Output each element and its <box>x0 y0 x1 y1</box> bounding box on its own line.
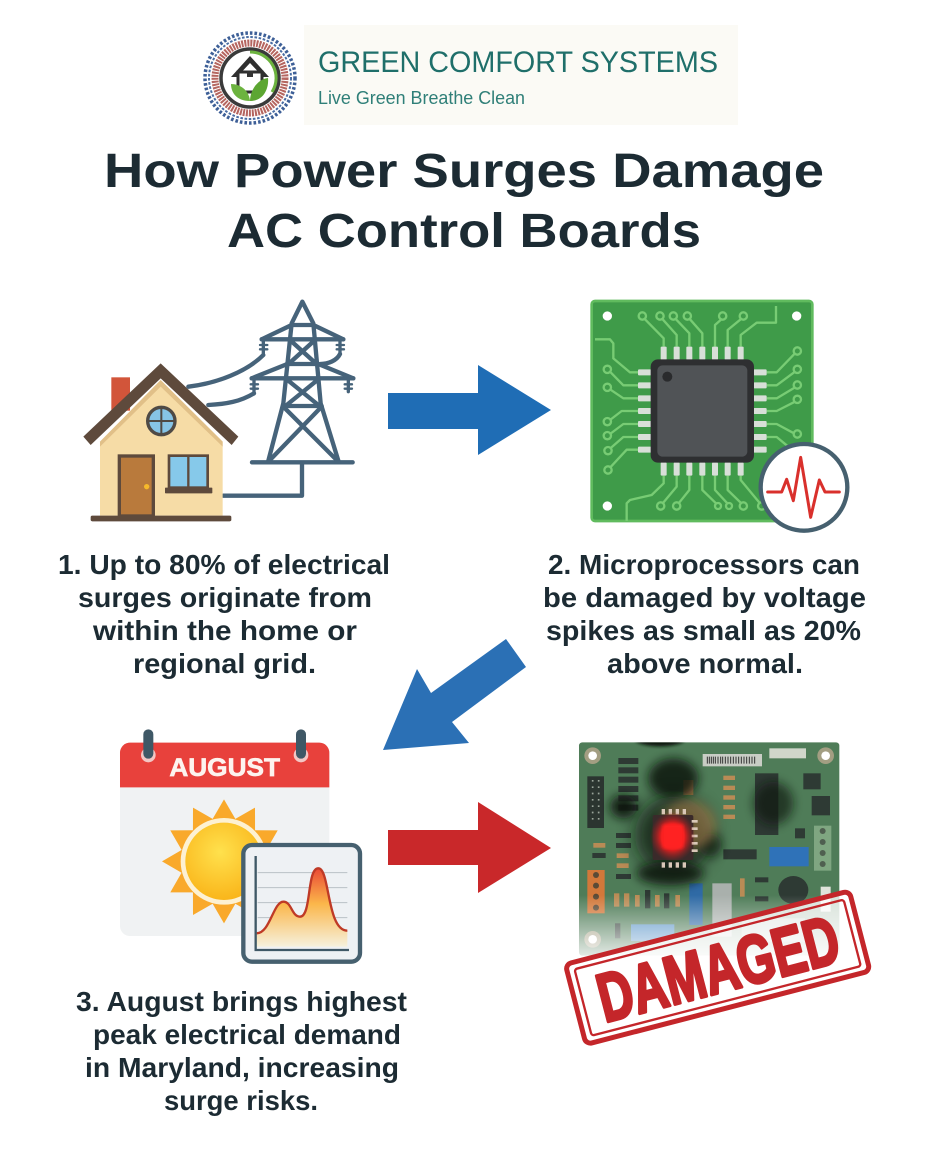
peak demand chart <box>243 845 360 962</box>
step 2 text: spikes as small as 20% <box>546 615 861 646</box>
bottom fade <box>579 895 839 957</box>
icon: transmission tower <box>188 302 353 496</box>
step 1 text: regional grid. <box>133 648 316 679</box>
step 2 text <box>543 549 866 679</box>
step 2 text: above normal. <box>607 648 803 679</box>
step 2 text: be damaged by voltage <box>543 582 866 613</box>
icon: circuit board with microprocessor <box>592 301 847 531</box>
title: How Power Surges Damage <box>104 145 824 198</box>
title: AC Control Boards <box>227 205 701 258</box>
arrow: step 1 to step 2 <box>388 365 551 455</box>
burnt glowing chip <box>650 800 717 868</box>
circuit traces <box>595 306 801 521</box>
logo banner <box>192 25 738 125</box>
scorch marks <box>610 732 793 885</box>
step 2 text: 2. Microprocessors can <box>548 549 860 580</box>
arrow: step 2 to step 3 <box>383 639 526 750</box>
calendar page <box>120 729 329 936</box>
corner mounting holes <box>584 747 834 948</box>
step 1 text: surges originate from <box>78 582 372 613</box>
icon: sun <box>162 799 286 923</box>
step 3 text <box>76 986 407 1116</box>
icon: house <box>83 363 238 521</box>
board components <box>587 748 831 942</box>
icon: voltage spike badge <box>761 444 847 531</box>
damaged stamp <box>565 891 870 1044</box>
icon: house and transmission tower <box>83 302 353 521</box>
step 3 text: surge risks. <box>164 1085 318 1116</box>
microprocessor chip <box>651 359 754 463</box>
logo badge <box>205 33 295 123</box>
chip pins <box>638 347 767 476</box>
icon: August calendar with sun and chart <box>120 729 360 962</box>
tagline: Live Green Breathe Clean <box>318 88 525 108</box>
title <box>104 145 824 258</box>
month label: AUGUST <box>169 754 281 782</box>
step 1 text: 1. Up to 80% of electrical <box>58 549 390 580</box>
company name: GREEN COMFORT SYSTEMS <box>318 46 718 79</box>
icon: damaged control board <box>565 732 870 1044</box>
step 3 text: in Maryland, increasing <box>85 1052 399 1083</box>
arrow: step 3 to step 4 <box>388 802 551 893</box>
step 1 text: within the home or <box>92 615 357 646</box>
step 1 text <box>58 549 390 679</box>
step 3 text: 3. August brings highest <box>76 986 407 1017</box>
step 3 text: peak electrical demand <box>93 1019 401 1050</box>
board <box>579 732 839 957</box>
